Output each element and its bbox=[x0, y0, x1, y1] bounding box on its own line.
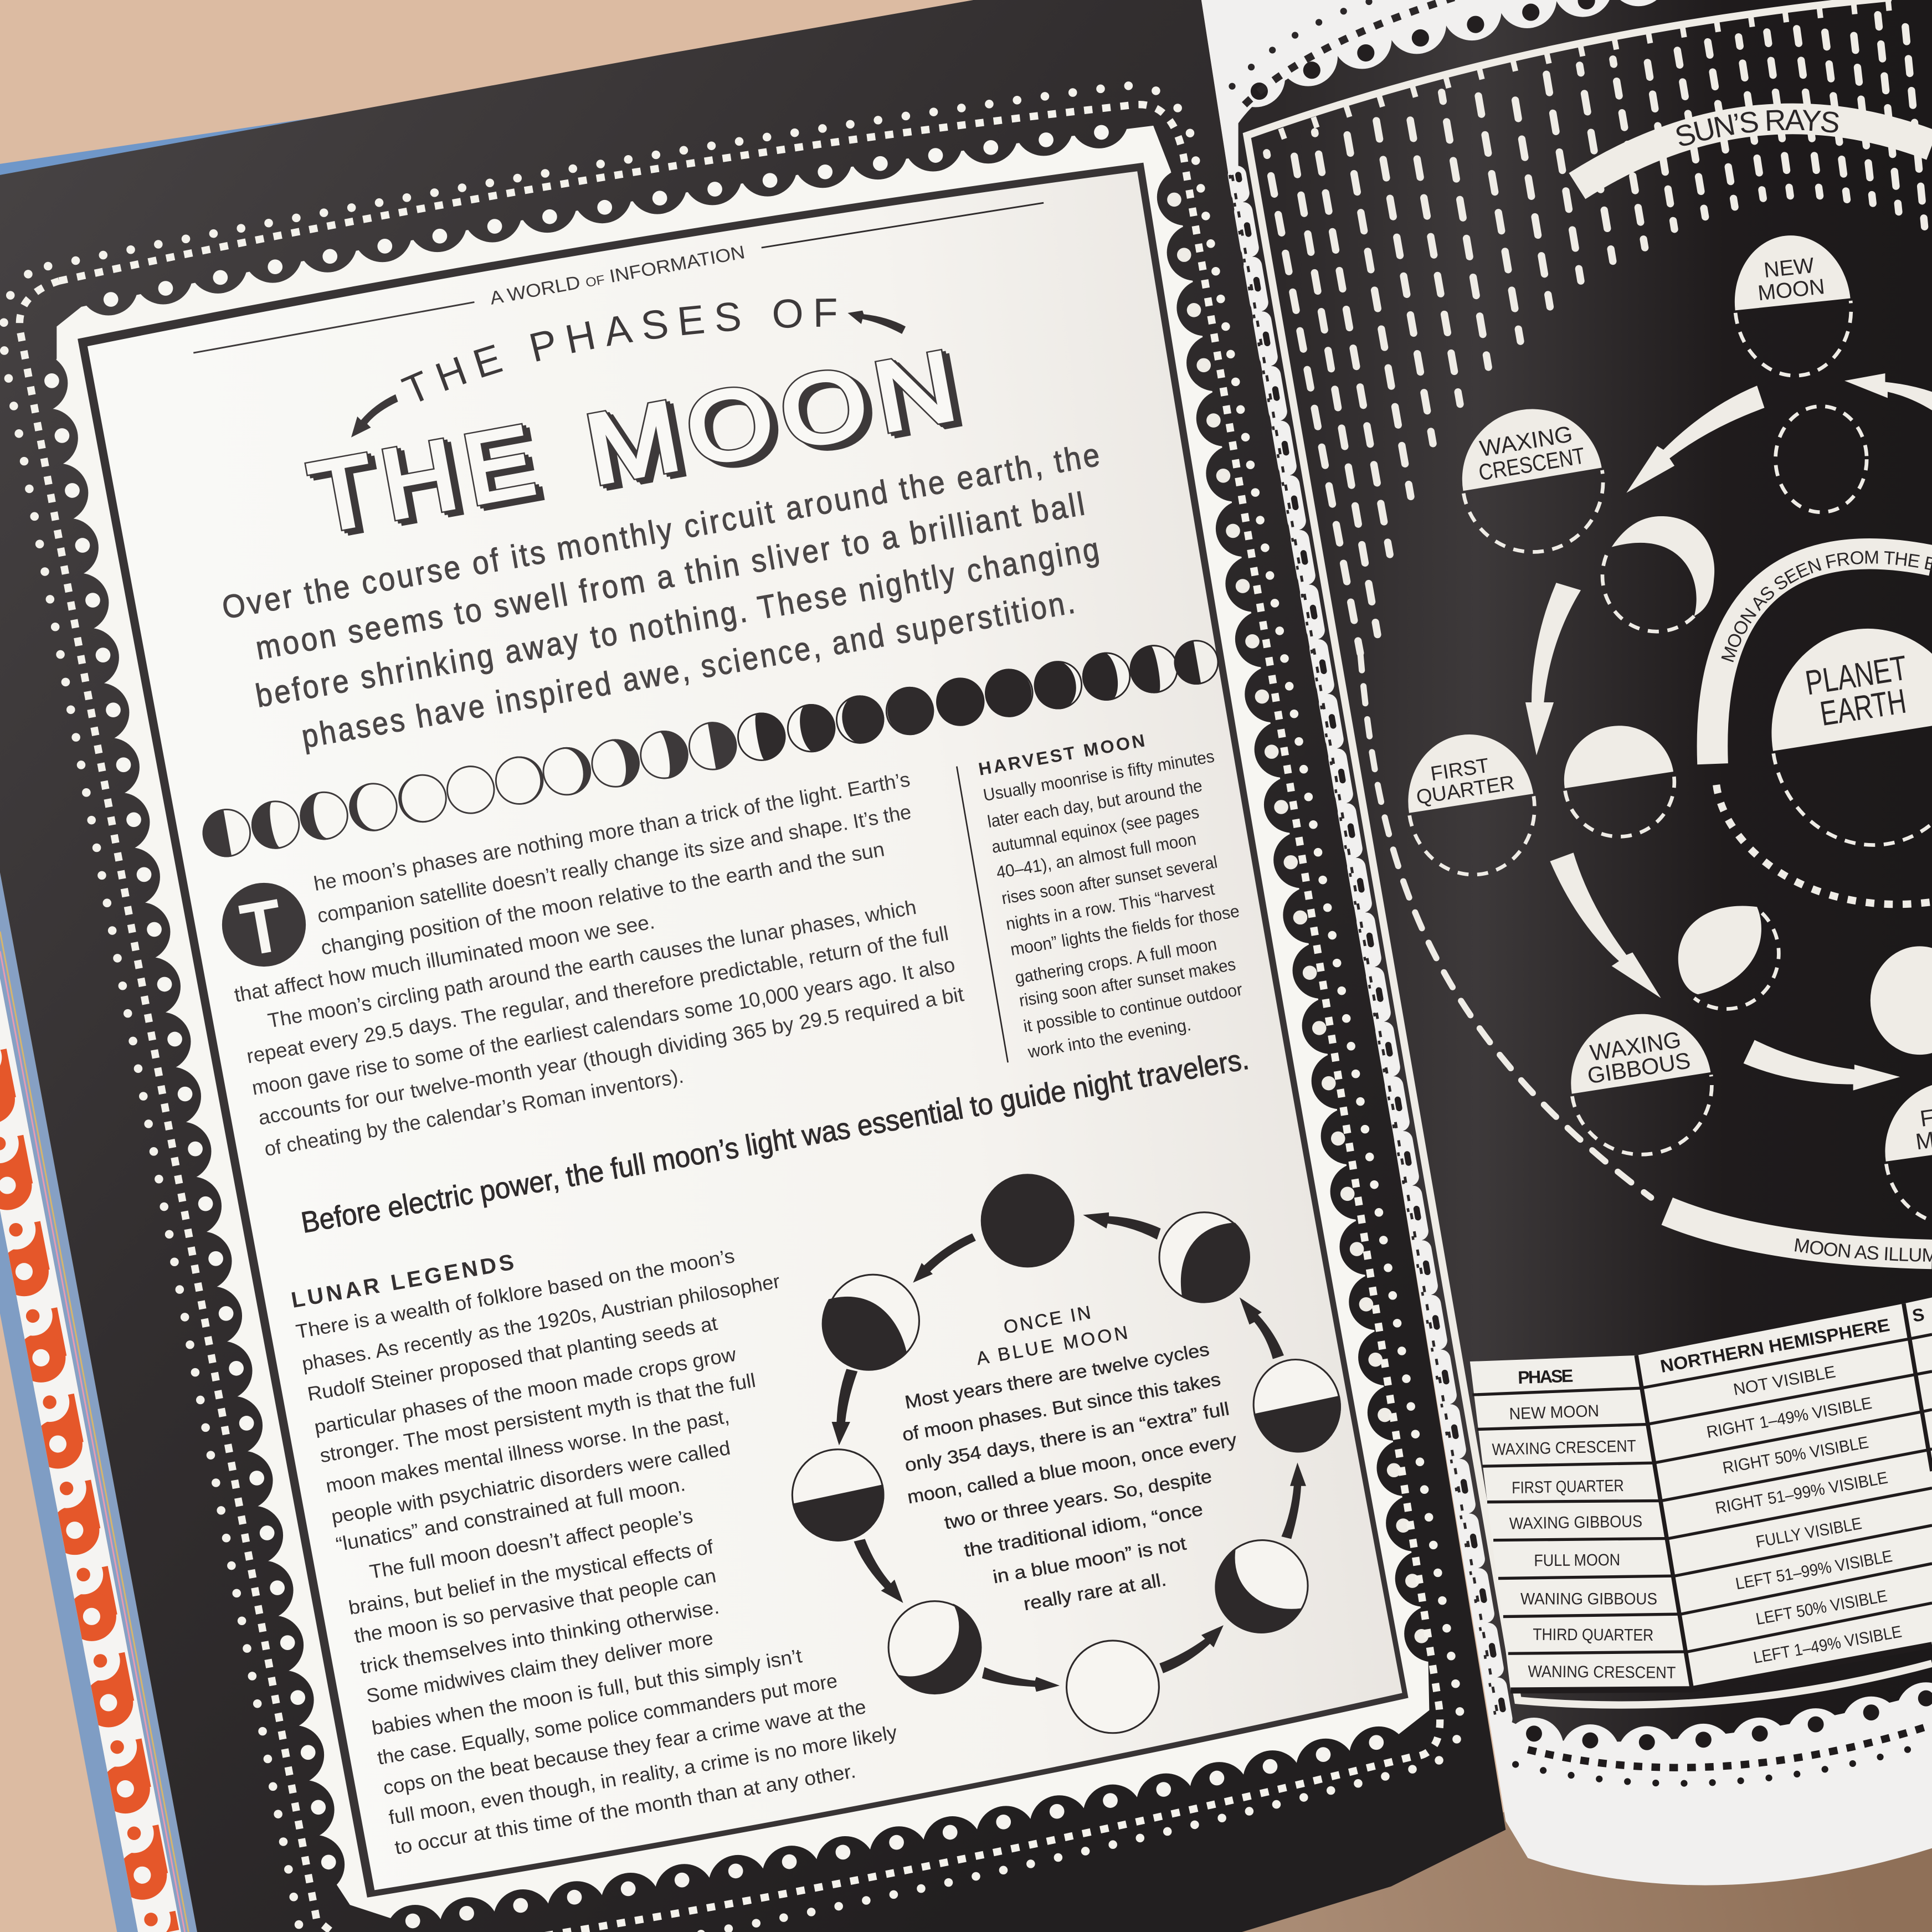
main body text bbox=[233, 768, 965, 1160]
moon: first quarter label bbox=[1399, 726, 1544, 883]
lunar legends section bbox=[290, 1245, 899, 1859]
panel: left page text area bbox=[88, 171, 1402, 1890]
lunar legends section: Rudolf Steiner proposed that planting seeds at bbox=[306, 1312, 719, 1405]
table column: phase names: THIRD QUARTER bbox=[1533, 1626, 1653, 1645]
lunar legends section: phases. As recently as the 1920s, Austrian philosopher bbox=[300, 1270, 782, 1375]
table column: northern hemisphere values: FULLY VISIBLE bbox=[1755, 1514, 1863, 1551]
main body text: of cheating by the calendar’s Roman inventors). bbox=[263, 1064, 685, 1160]
sidebar: harvest moon: work into the evening. bbox=[1026, 1015, 1193, 1062]
sidebar: harvest moon: later each day, but around the bbox=[986, 775, 1204, 831]
main body text: that affect how much illuminated moon we see. bbox=[233, 910, 656, 1006]
text: once in a blue moon: only 354 days, there is an “extra” full bbox=[903, 1399, 1231, 1476]
moon: full moon label bbox=[1876, 1073, 1932, 1234]
intro paragraph: phases have inspired awe, science, and superstition. bbox=[299, 584, 1080, 755]
patterned endpaper strip bbox=[0, 897, 181, 1932]
border: left page lace frame bbox=[3, 86, 1460, 1932]
sidebar: harvest moon: 40–41), an almost full moon bbox=[995, 829, 1198, 882]
frame: left page black rule bbox=[78, 163, 1409, 1898]
arrows: orbit direction on the right page bbox=[1525, 373, 1932, 1091]
main body text: repeat every 29.5 days. The regular, and therefore predictable, return of the full bbox=[245, 922, 950, 1068]
title: The Moon in extruded letters: THE bbox=[302, 403, 552, 553]
intro paragraph bbox=[219, 436, 1104, 755]
table column: phase names: WANING GIBBOUS bbox=[1520, 1590, 1657, 1608]
moon: gibbous upper left bbox=[823, 1275, 919, 1370]
table header: northern hemisphere: NORTHERN HEMISPHERE bbox=[1658, 1315, 1892, 1376]
lunar legends section: the case. Equally, some police commanders put more bbox=[376, 1669, 839, 1769]
rule: left of running head bbox=[193, 302, 474, 353]
table column: northern hemisphere values: LEFT 50% VISIBLE bbox=[1755, 1587, 1889, 1628]
title: The Moon in extruded letters: THE bbox=[309, 407, 559, 557]
main body text: moon gave rise to some of the earliest calendars some 10,000 years ago. It also bbox=[250, 953, 957, 1099]
lunar legends section: LUNAR LEGENDS bbox=[290, 1250, 516, 1313]
table: moon visibility by hemisphere bbox=[1470, 1297, 1932, 1691]
table column: northern hemisphere values: RIGHT 51–99% VISIBLE bbox=[1714, 1468, 1889, 1518]
main body text: companion satellite doesn’t really change its size and shape. It’s the bbox=[316, 800, 913, 927]
moon phase strip bbox=[199, 638, 1221, 860]
title: The Moon in extruded letters: THE bbox=[302, 403, 552, 553]
sidebar rule bbox=[957, 767, 1008, 1062]
table column: northern hemisphere values: RIGHT 50% VISIBLE bbox=[1721, 1433, 1870, 1477]
book cover edge: blue top bbox=[0, 105, 403, 177]
sidebar: harvest moon: HARVEST MOON bbox=[977, 730, 1147, 779]
pull quote: Before electric power, the full moon’s light was essential to guide night travelers. bbox=[299, 1043, 1251, 1240]
title: The Moon in extruded letters: MOON bbox=[578, 328, 973, 505]
lunar legends section: cops on the beat because they fear a crime wave at the bbox=[382, 1695, 867, 1799]
table header: cut-off third column: S bbox=[1910, 1304, 1926, 1326]
intro paragraph: before shrinking away to nothing. These nightly changing bbox=[253, 531, 1104, 715]
table column: phase names: WAXING CRESCENT bbox=[1492, 1437, 1636, 1459]
lunar legends section: babies when the moon is full, but this simply isn’t bbox=[370, 1645, 804, 1739]
moon: new moon label bbox=[1728, 230, 1858, 382]
sidebar: harvest moon: autumnal equinox (see pages bbox=[990, 803, 1200, 857]
frame: rule ticks bbox=[1257, 5, 1892, 143]
intro paragraph: Over the course of its monthly circuit around the earth, the bbox=[219, 436, 1104, 626]
title: arched line: THE PHASES OF bbox=[400, 299, 836, 402]
orbit: inner square-dashed ring bbox=[1717, 785, 1932, 905]
text: once in a blue moon bbox=[901, 1302, 1239, 1615]
moon: half right bbox=[1245, 1352, 1349, 1460]
moon: first quarter label: QUARTER bbox=[1415, 771, 1516, 809]
lunar legends section: stronger. The most persistent myth is that the full bbox=[318, 1369, 757, 1467]
lunar legends section: the moon is so pervasive that people can bbox=[353, 1564, 718, 1647]
moon cycle diagram bbox=[784, 1174, 1349, 1733]
text: once in a blue moon: Most years there are twelve cycles bbox=[903, 1339, 1211, 1413]
lunar legends section: people with psychiatric disorders were called bbox=[330, 1437, 732, 1528]
sidebar: harvest moon: rising soon after sunset makes bbox=[1018, 954, 1237, 1010]
lunar legends section: “lunatics” and constrained at full moon. bbox=[334, 1473, 687, 1556]
lunar legends section: The full moon doesn’t affect people’s bbox=[368, 1505, 695, 1583]
arrow: title left bbox=[351, 394, 398, 438]
moon: inner quarter phase bbox=[1556, 718, 1682, 844]
table column: phase names: FULL MOON bbox=[1534, 1551, 1620, 1570]
banner: sun's rays bbox=[1577, 104, 1932, 196]
lunar legends section: Some midwives claim they deliver more bbox=[364, 1627, 715, 1707]
moon: waxing crescent label bbox=[1452, 398, 1614, 563]
table column: phase names: NEW MOON bbox=[1509, 1402, 1600, 1424]
moon: waxing gibbous label bbox=[1561, 1004, 1722, 1164]
moon: waxing crescent label: CRESCENT bbox=[1477, 443, 1587, 485]
page block edges: thin coloured stack bbox=[0, 872, 197, 1932]
title: The Moon in extruded letters: MOON bbox=[578, 328, 973, 505]
text: once in a blue moon: A BLUE MOON bbox=[975, 1323, 1129, 1369]
lunar legends section: particular phases of the moon made crops grow bbox=[312, 1343, 738, 1438]
moon: inner new phase bbox=[1775, 406, 1867, 512]
table header: phase: PHASE bbox=[1518, 1366, 1574, 1388]
panel: right page dark background bbox=[1239, 0, 1932, 1742]
rule: right of running head bbox=[762, 203, 1044, 248]
text: once in a blue moon: really rare at all. bbox=[1022, 1570, 1168, 1615]
main body text: changing position of the moon relative to the earth and the sun bbox=[319, 837, 886, 959]
running head: A WORLD OF INFORMATION bbox=[489, 242, 747, 309]
table column: northern hemisphere values: LEFT 1–49% VISIBLE bbox=[1752, 1622, 1903, 1667]
text: once in a blue moon: two or three years. So, despite bbox=[943, 1466, 1214, 1533]
table column: northern hemisphere values: LEFT 51–99% VISIBLE bbox=[1734, 1547, 1894, 1593]
table column: phase names: WANING CRESCENT bbox=[1528, 1663, 1676, 1682]
moon: planet earth bbox=[1756, 614, 1932, 859]
table column: phase names: WAXING GIBBOUS bbox=[1509, 1512, 1642, 1533]
moon: first quarter label: FIRST bbox=[1429, 754, 1491, 785]
intro paragraph: moon seems to swell from a thin sliver to a brilliant ball bbox=[253, 486, 1090, 667]
moon: waxing gibbous label: GIBBOUS bbox=[1586, 1047, 1692, 1088]
banner: moon as seen from the earth: MOON AS SEEN FROM THE EARTH bbox=[0, 0, 1932, 665]
moon: waxing crescent label: WAXING bbox=[1478, 421, 1574, 461]
text: once in a blue moon: of moon phases. But since this takes bbox=[901, 1369, 1222, 1446]
path holder for arched title bbox=[407, 326, 850, 408]
sidebar: harvest moon: moon” lights the fields for those bbox=[1009, 901, 1241, 959]
title: The Moon in extruded letters: THE bbox=[305, 405, 556, 555]
moon: new (dark) bbox=[981, 1174, 1075, 1267]
moon: full (white) bbox=[1067, 1641, 1159, 1733]
table column: northern hemisphere values bbox=[1705, 1363, 1903, 1667]
text: once in a blue moon: moon, called a blue moon, once every bbox=[906, 1430, 1239, 1508]
lunar legends section: There is a wealth of folklore based on the moon’s bbox=[294, 1245, 736, 1343]
sidebar: harvest moon: rises soon after sunset several bbox=[1000, 852, 1219, 908]
lunar legends section: full moon, even though, in reality, a crime is no more likely bbox=[387, 1721, 899, 1829]
main body text: The moon’s circling path around the earth causes the lunar phases, which bbox=[266, 896, 918, 1032]
moon: crescent lower right bbox=[1216, 1540, 1308, 1632]
chart: sun's rays dashed columns bbox=[1267, 10, 1925, 653]
arrow: title right bbox=[847, 311, 906, 334]
table column: phase names: FIRST QUARTER bbox=[1512, 1477, 1624, 1497]
sidebar: harvest moon: gathering crops. A full moon bbox=[1014, 934, 1218, 988]
title: The Moon in extruded letters: MOON bbox=[585, 332, 980, 509]
moon: half left bbox=[784, 1441, 892, 1549]
moon: new moon label: NEW bbox=[1763, 254, 1815, 282]
title: The Moon in extruded letters bbox=[302, 327, 980, 558]
banner: moon as illuminated by the sun: MOON AS ILLUMINATED BY THE SUN bbox=[0, 0, 1932, 1266]
text: once in a blue moon: in a blue moon” is not bbox=[991, 1533, 1188, 1587]
book cover edge: blue side bbox=[0, 1210, 138, 1932]
sidebar: harvest moon: Usually moonrise is fifty minutes bbox=[982, 747, 1216, 805]
moon: waxing gibbous label: WAXING bbox=[1589, 1026, 1683, 1066]
orbit: dashed path of the moon bbox=[1360, 653, 1651, 1198]
text: once in a blue moon: ONCE IN bbox=[1002, 1302, 1092, 1338]
lunar legends section: to occur at this time of the month than at any other. bbox=[393, 1760, 857, 1859]
moon: waning gibbous upper right bbox=[1159, 1212, 1249, 1302]
sidebar: harvest moon: it possible to continue outdoor bbox=[1022, 979, 1244, 1036]
lunar legends section: trick themselves into thinking otherwise. bbox=[359, 1596, 721, 1678]
moon: new moon label: MOON bbox=[1756, 275, 1826, 305]
banner: sun's rays: SUN’S RAYS bbox=[1676, 110, 1839, 146]
panel: left page dark background bbox=[0, 0, 1505, 1932]
moon: inner full phase bbox=[1871, 946, 1932, 1055]
moon: inner gibbous phase bbox=[1678, 906, 1779, 1009]
table column: northern hemisphere values: NOT VISIBLE bbox=[1732, 1363, 1837, 1399]
moon: inner crescent phase bbox=[1602, 516, 1714, 631]
frame: right page white rule bbox=[1247, 0, 1932, 1705]
drop cap: T bbox=[235, 883, 289, 972]
sidebar: harvest moon: nights in a row. This “harvest bbox=[1004, 879, 1216, 934]
lunar legends section: brains, but belief in the mystical effects of bbox=[347, 1535, 715, 1619]
moon: crescent lower left bbox=[888, 1601, 981, 1694]
lunar legends section: moon makes mental illness worse. In the past, bbox=[324, 1405, 731, 1497]
main body text: he moon’s phases are nothing more than a trick of the light. Earth’s bbox=[312, 768, 912, 895]
text: once in a blue moon: the traditional idiom, “once bbox=[963, 1499, 1205, 1561]
arrows: cycle direction bbox=[832, 1212, 1306, 1692]
table column: northern hemisphere values: RIGHT 1–49% VISIBLE bbox=[1705, 1394, 1873, 1442]
background: shaded table under the book bbox=[1242, 1811, 1932, 1932]
table column: phase names bbox=[1492, 1402, 1676, 1682]
panel: right page curled white paper bbox=[1201, 0, 1932, 1885]
title: The Moon in extruded letters: MOON bbox=[582, 330, 977, 507]
sidebar: harvest moon bbox=[977, 730, 1244, 1062]
main body text: accounts for our twelve-month year (though dividing 365 by 29.5 required a bit bbox=[256, 983, 965, 1129]
border: right page lace edges bbox=[1230, 0, 1932, 1784]
